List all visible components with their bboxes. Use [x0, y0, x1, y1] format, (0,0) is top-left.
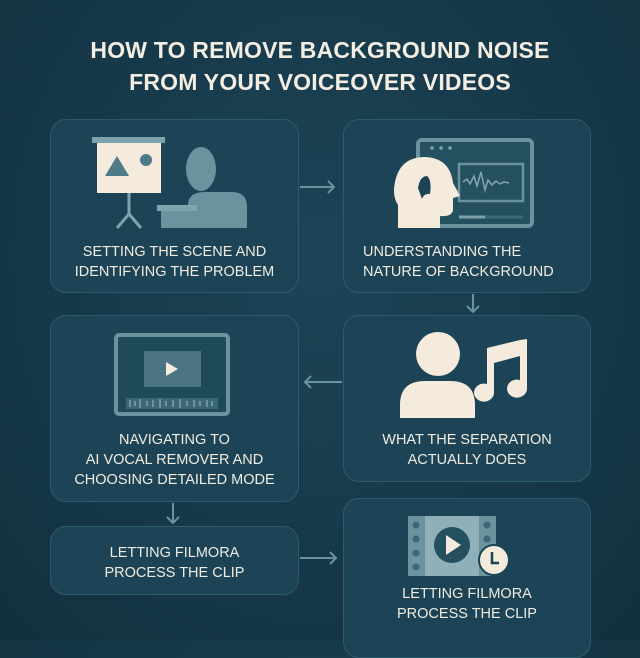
panel: separation	[343, 315, 591, 482]
title: HOW TO REMOVE BACKGROUND NOISE	[90, 37, 550, 63]
text: navigating: NAVIGATING TO	[119, 432, 230, 448]
text: separation: ACTUALLY DOES	[408, 452, 526, 468]
arrow: 4 to 3	[305, 376, 342, 388]
text: understanding	[363, 244, 554, 280]
icon: person at desk	[157, 147, 247, 228]
text: navigating: CHOOSING DETAILED MODE	[74, 472, 275, 488]
text: letting filmora left	[105, 545, 244, 581]
text: letting filmora right: PROCESS THE CLIP	[397, 606, 537, 622]
text: letting filmora right	[397, 586, 537, 622]
text: navigating: AI VOCAL REMOVER AND	[86, 452, 263, 468]
arrow: 3 to 5	[167, 503, 179, 523]
arrow: 1 to 2	[300, 181, 334, 193]
icon: film strip with clock	[408, 516, 509, 576]
text: letting filmora right: LETTING FILMORA	[402, 586, 532, 602]
text: separation: WHAT THE SEPARATION	[382, 432, 552, 448]
text: letting filmora left: PROCESS THE CLIP	[105, 565, 244, 581]
panel: letting filmora right	[343, 498, 591, 658]
text: separation	[382, 432, 552, 468]
panel: understanding	[343, 119, 591, 293]
panel: navigating	[50, 315, 299, 502]
arrow: 2 to 4	[467, 294, 479, 312]
panel: letting filmora left	[50, 526, 299, 595]
icon: person and music note	[400, 332, 527, 418]
text: understanding: NATURE OF BACKGROUND	[363, 264, 554, 280]
text: setting the scene	[75, 244, 274, 280]
text: setting the scene: IDENTIFYING THE PROBLEM	[75, 264, 274, 280]
icon: head with audio window	[394, 140, 532, 228]
panel: setting the scene	[50, 119, 299, 293]
text: setting the scene: SETTING THE SCENE AND	[83, 244, 266, 260]
icon: presentation board	[92, 137, 165, 228]
arrow: 5 to 6	[300, 552, 336, 564]
text: navigating	[74, 432, 275, 488]
text: letting filmora left: LETTING FILMORA	[110, 545, 239, 561]
icon: monitor with video	[116, 335, 228, 414]
title	[90, 37, 550, 95]
title: FROM YOUR VOICEOVER VIDEOS	[129, 69, 511, 95]
text: understanding: UNDERSTANDING THE	[363, 244, 521, 260]
